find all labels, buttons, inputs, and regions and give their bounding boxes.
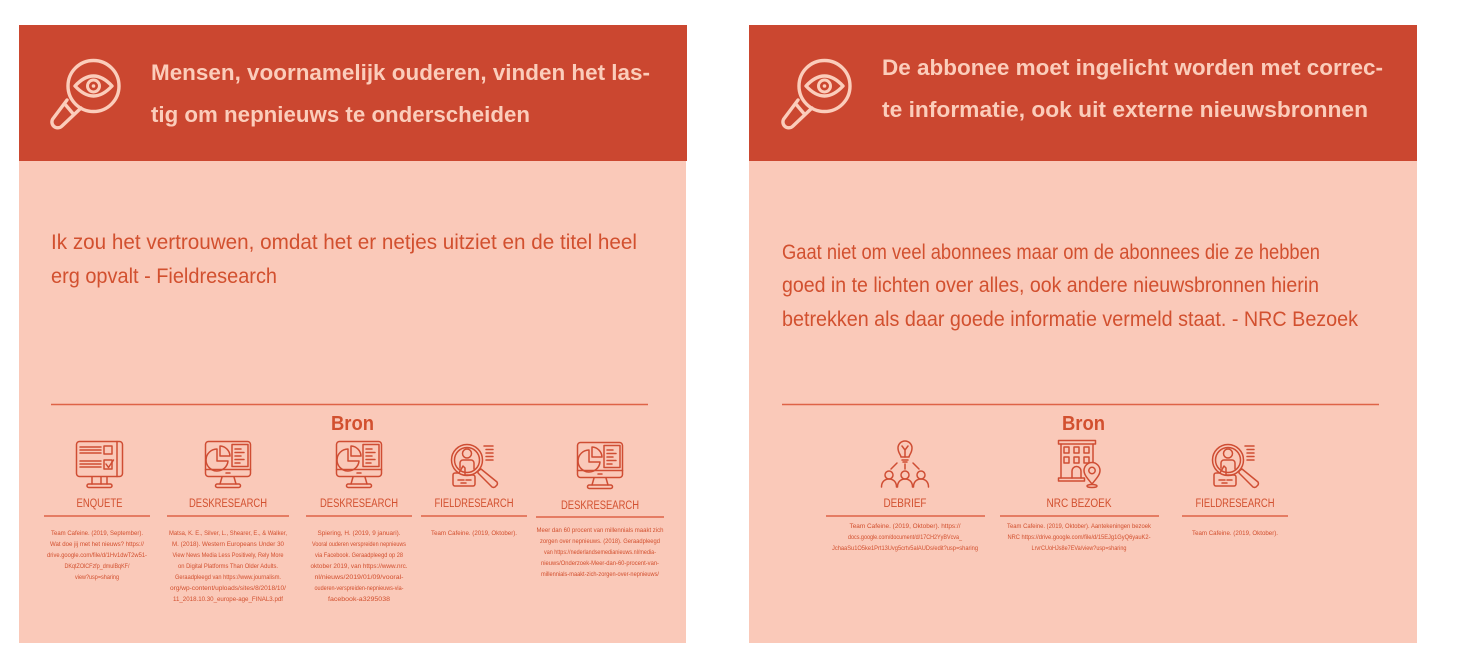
icon: magnifier with eye xyxy=(52,60,119,128)
quote xyxy=(51,231,637,288)
quote: Ik zou het vertrouwen, omdat het er netjes uitziet en de titel heel xyxy=(51,231,637,254)
label: NRC BEZOEK xyxy=(1046,498,1112,510)
panel: left xyxy=(19,25,687,643)
heading: Bron: Bron xyxy=(1062,413,1105,435)
source: enquete xyxy=(44,442,150,581)
citation xyxy=(536,527,664,578)
quote: Gaat niet om veel abonnees maar om de abonnees die ze hebben xyxy=(782,241,1320,264)
quote: erg opvalt - Fieldresearch xyxy=(51,265,277,288)
source: deskresearch 1 xyxy=(167,442,289,603)
citation: 11_2018.10.30_europe-age_FINAL3.pdf xyxy=(173,596,283,603)
citation: facebook-a3295038 xyxy=(328,596,391,603)
header band xyxy=(19,25,687,161)
citation: JchaaSu1O5ke1Prt13Uvg5crtv5alAUDs/edit?usp=sharing xyxy=(832,545,979,552)
icon: monitor with chart xyxy=(578,442,622,488)
citation: NRC https://drive.google.com/file/d/15EJg1GyQ6yauK2- xyxy=(1008,534,1150,541)
citation: Wat doe jij met het nieuws? https:// xyxy=(50,541,144,548)
citation: Meer dan 60 procent van millennials maakt zich xyxy=(536,527,664,534)
citation: LrvrCUoHJs8e7EVa/view?usp=sharing xyxy=(1032,545,1127,552)
citation: nl/nieuws/2019/01/09/vooral- xyxy=(314,574,404,581)
heading: Mensen, voornamelijk ouderen, vinden het las- xyxy=(151,60,650,85)
citation: Team Cafeine. (2019, Oktober). xyxy=(431,530,517,537)
citation: Geraadpleegd van https://www.journalism. xyxy=(175,574,281,581)
label: DEBRIEF xyxy=(884,498,926,510)
citation: View News Media Less Positively, Rely More xyxy=(172,552,284,559)
heading: tig om nepnieuws te onderscheiden xyxy=(151,102,530,127)
citation: M. (2018). Western Europeans Under 30 xyxy=(172,541,285,548)
source: fieldresearch xyxy=(421,444,527,537)
label: ENQUETE xyxy=(76,498,123,510)
quote: goed in te lichten over alles, ook andere nieuwsbronnen hierin xyxy=(782,274,1319,297)
heading xyxy=(151,60,650,127)
citation: Matsa, K. E., Silver, L., Shearer, E., & Walker, xyxy=(169,530,287,537)
heading: Bron: Bron xyxy=(331,413,374,435)
source: deskresearch 2 xyxy=(306,442,412,603)
panel background xyxy=(749,25,1417,643)
citation: DKqtZOlCFzfp_dmulBqKF/ xyxy=(64,563,130,570)
citation xyxy=(47,530,147,581)
citation: van https://nederlandsemedianieuws.nl/media- xyxy=(544,549,656,556)
icon: building with location pin xyxy=(1058,440,1100,488)
citation: zorgen over nepnieuws. (2018). Geraadpleegd xyxy=(540,538,661,545)
icon: magnifier with eye xyxy=(783,60,850,128)
panel: right xyxy=(749,25,1417,643)
citation: millennials-maakt-zich-zorgen-over-nepnieuws/ xyxy=(541,571,659,578)
panel background xyxy=(19,25,686,643)
header band xyxy=(749,25,1417,161)
source: fieldresearch xyxy=(1182,444,1288,537)
citation: Team Cafeine. (2019, Oktober). Aantekeningen bezoek xyxy=(1007,523,1152,530)
label: FIELDRESEARCH xyxy=(434,498,514,510)
citation: oktober 2019, van https://www.nrc. xyxy=(310,563,408,570)
citation: nieuws/Onderzoek-Meer-dan-60-procent-van- xyxy=(541,560,659,567)
citation: org/wp-content/uploads/sites/8/2018/10/ xyxy=(170,585,286,592)
citation: ouderen-verspreiden-nepnieuws-via- xyxy=(314,585,404,592)
icon: team with light bulb xyxy=(882,441,928,487)
source: deskresearch 3 xyxy=(536,442,664,578)
icon: survey screen xyxy=(76,442,122,488)
label: FIELDRESEARCH xyxy=(1196,498,1274,510)
label: DESKRESEARCH xyxy=(320,498,398,510)
citation xyxy=(1007,523,1152,552)
icon: person under magnifier xyxy=(1212,444,1258,487)
citation: on Digital Platforms Than Older Adults. xyxy=(178,563,278,570)
citation: docs.google.com/document/d/17CH2YyBVcva_ xyxy=(848,534,962,541)
heading: De abbonee moet ingelicht worden met correc- xyxy=(882,55,1383,80)
citation: via Facebook. Geraadpleegd op 28 xyxy=(315,552,403,559)
citation xyxy=(310,530,408,603)
citation: Spiering, H. (2019, 9 januari). xyxy=(318,530,401,537)
label: DESKRESEARCH xyxy=(189,498,267,510)
citation: Team Cafeine. (2019, September). xyxy=(51,530,143,537)
citation: drive.google.com/file/d/1Hv1dwT2w51- xyxy=(47,552,147,559)
icon: monitor with chart xyxy=(206,442,250,488)
citation: Vooral ouderen verspreiden nepnieuws xyxy=(312,541,406,548)
quote xyxy=(782,241,1358,331)
quote: betrekken als daar goede informatie vermeld staat. - NRC Bezoek xyxy=(782,308,1358,331)
heading xyxy=(882,55,1383,122)
citation: view?usp=sharing xyxy=(75,574,119,581)
icon: monitor with chart xyxy=(336,442,382,488)
citation: Team Cafeine. (2019, Oktober). https:// xyxy=(850,523,961,530)
heading: te informatie, ook uit externe nieuwsbronnen xyxy=(882,97,1368,122)
citation xyxy=(169,530,287,603)
source: NRC bezoek xyxy=(1000,440,1159,552)
label: DESKRESEARCH xyxy=(561,500,639,512)
source: debrief xyxy=(826,441,985,552)
citation: Team Cafeine. (2019, Oktober). xyxy=(1192,530,1278,537)
icon: person under magnifier xyxy=(452,444,497,487)
citation xyxy=(832,523,979,552)
